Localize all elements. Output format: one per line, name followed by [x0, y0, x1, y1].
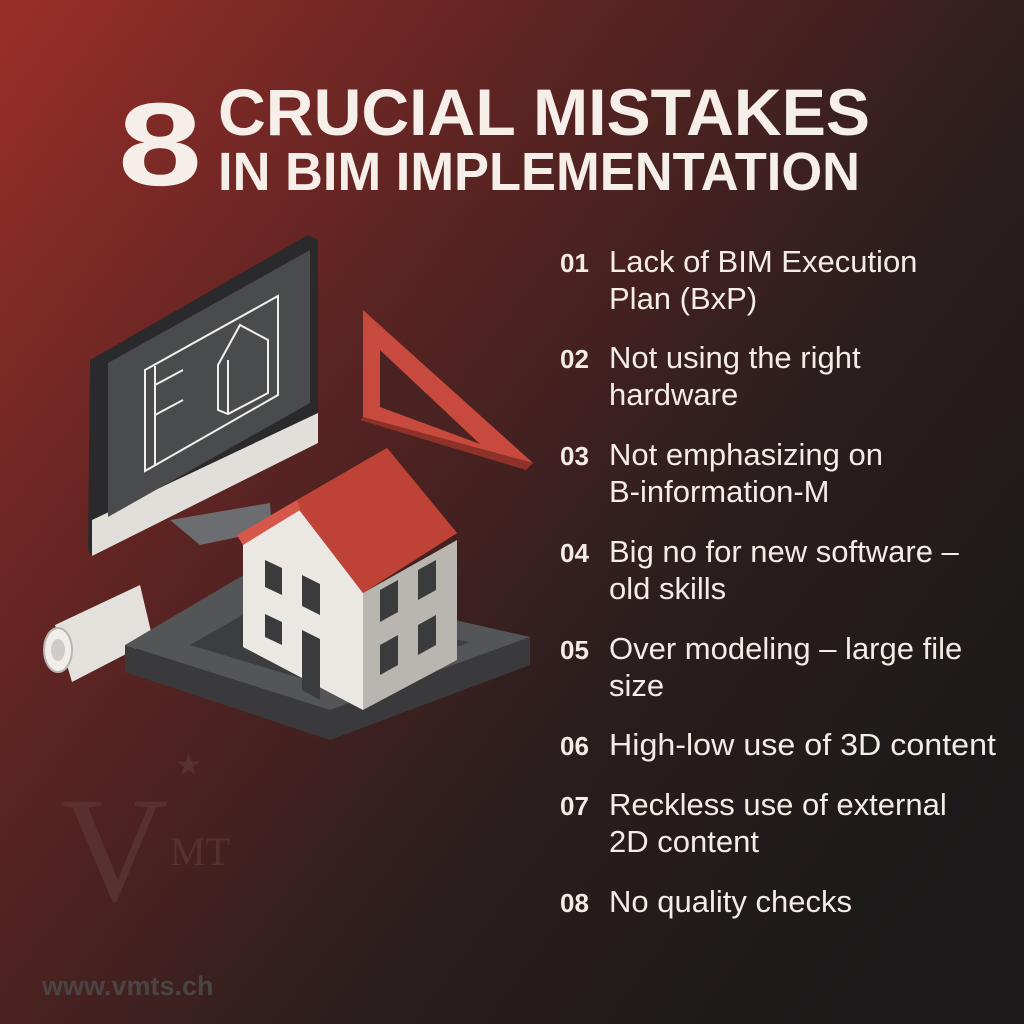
title: 8: [118, 79, 202, 211]
title: [118, 75, 870, 211]
icon: house: [237, 448, 457, 710]
item 03: B-information-M: [609, 474, 830, 509]
item 06: 06: [560, 731, 589, 761]
item 04: 04: [560, 538, 589, 568]
item 05: [560, 631, 962, 703]
item 07: 07: [560, 791, 589, 821]
item 04: Big no for new software –: [609, 534, 960, 569]
item 04: old skills: [609, 571, 726, 606]
item 05: Over modeling – large file: [609, 631, 962, 666]
website url: www.vmts.ch: [41, 971, 214, 1001]
item 03: [560, 437, 883, 509]
watermark logo: ★: [175, 749, 202, 782]
icon: triangle ruler: [360, 310, 533, 470]
list of mistakes: [560, 244, 996, 919]
item 05: size: [609, 668, 664, 703]
illustration: [44, 235, 533, 740]
item 01: Lack of BIM Execution: [609, 244, 917, 279]
item 03: Not emphasizing on: [609, 437, 883, 472]
item 08: 08: [560, 888, 589, 918]
item 01: [560, 244, 917, 316]
item 07: Reckless use of external: [609, 787, 947, 822]
item 06: High-low use of 3D content: [609, 727, 996, 762]
item 04: [560, 534, 960, 606]
item 01: 01: [560, 248, 589, 278]
icon: base platform: [125, 573, 530, 740]
title: IN BIM IMPLEMENTATION: [218, 142, 860, 202]
item 02: hardware: [609, 377, 738, 412]
item 07: [560, 787, 947, 859]
watermark logo: V: [60, 767, 168, 933]
title: CRUCIAL MISTAKES: [218, 75, 870, 149]
item 02: Not using the right: [609, 340, 861, 375]
watermark logo: MT: [170, 829, 230, 874]
watermark logo: [60, 749, 230, 933]
item 01: Plan (BxP): [609, 281, 757, 316]
item 08: No quality checks: [609, 884, 852, 919]
item 05: 05: [560, 635, 589, 665]
item 07: 2D content: [609, 824, 759, 859]
item 02: [560, 340, 861, 412]
icon: paper scroll: [44, 585, 153, 682]
item 03: 03: [560, 441, 589, 471]
item 02: 02: [560, 344, 589, 374]
icon: monitor: [88, 235, 318, 556]
